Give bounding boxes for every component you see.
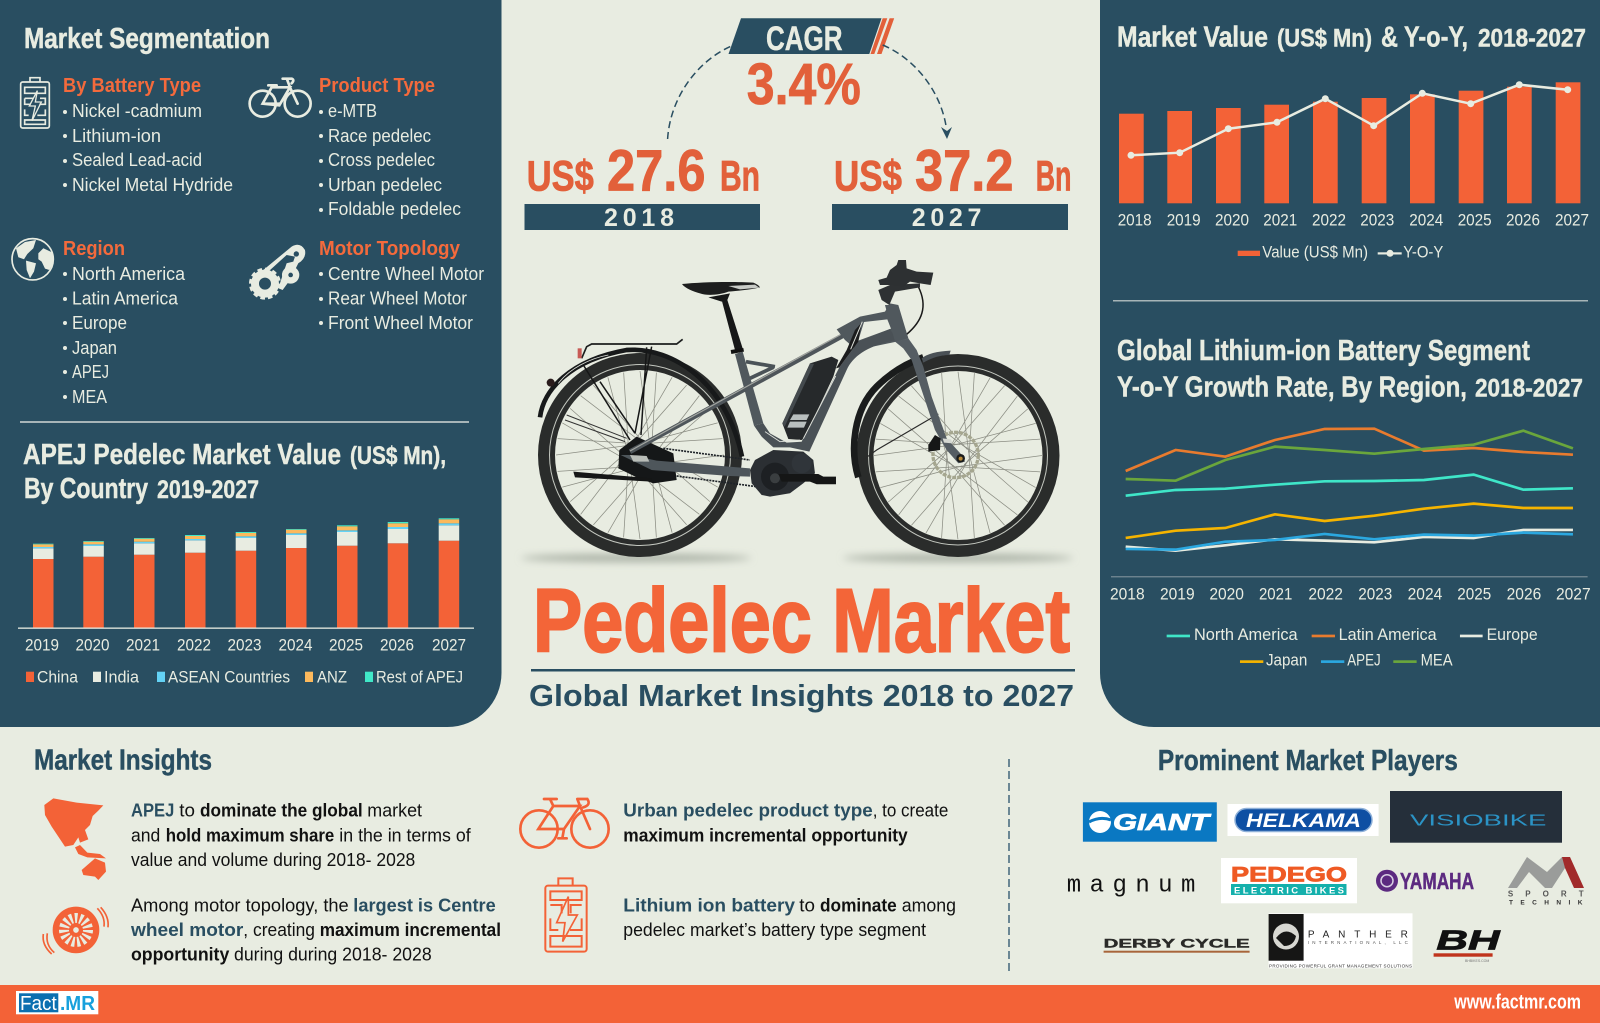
- list: by battery type: By Battery Type: [63, 75, 201, 97]
- logo: Yamaha: [1376, 868, 1474, 894]
- insight: APEJ: hold maximum share: [166, 824, 334, 845]
- footer: [0, 985, 1600, 1023]
- logo: Yamaha: YAMAHA: [1400, 868, 1474, 894]
- logo: Pedego: [1221, 858, 1357, 903]
- stacked bar chart: APEJ by country: 2021: [126, 636, 160, 655]
- line chart: growth by region: 2026: [1507, 584, 1541, 603]
- rear section of the bicycle: [540, 339, 757, 487]
- combo chart: market value and YoY: 2025: [1458, 211, 1492, 230]
- list: region: Region: [63, 238, 125, 260]
- chart legend: value and YoY: Y-O-Y: [1403, 243, 1443, 262]
- stacked bar chart: APEJ by country: 2023: [228, 636, 262, 655]
- panel: CAGR and market size: [524, 18, 1071, 232]
- heading: market value: 2018-2027: [1478, 25, 1586, 53]
- list: motor topology: Motor Topology: [319, 238, 461, 260]
- list: by battery type: Sealed Lead-acid: [72, 150, 202, 170]
- insight: APEJ: APEJ: [131, 800, 174, 821]
- combo chart: market value and YoY: [1118, 81, 1589, 230]
- logo: Visiobike: [1390, 791, 1562, 843]
- logo: BH: [1434, 924, 1501, 963]
- chart legend: regions: Europe: [1487, 625, 1538, 644]
- list: product type: Foldable pedelec: [328, 199, 461, 219]
- insight: motor topology: during during 2018- 2028: [234, 944, 432, 965]
- title: Pedelec Market: Pedelec Market: [533, 572, 1070, 672]
- insight: lithium ion battery: [623, 894, 956, 940]
- logo: Panther: PROVIDING POWERFUL GRANT MANAGEMENT SOLUTIONS: [1269, 963, 1412, 968]
- insight: APEJ: [131, 800, 472, 870]
- icon: bicycle: [250, 79, 311, 117]
- insight: APEJ: market: [367, 800, 422, 821]
- logo: Pedego: ELECTRIC BIKES: [1234, 886, 1344, 896]
- logo: M1 Sport Technik: [1508, 857, 1584, 907]
- list: by battery type: Nickel -cadmium: [72, 101, 202, 121]
- panel: left market segmentation and APEJ: [0, 0, 502, 727]
- chart legend: value and YoY: [1238, 243, 1443, 262]
- chart legend: APEJ countries: China: [37, 668, 78, 687]
- value: 2018 market size: Bn: [720, 153, 760, 201]
- heading: market value: (US$ Mn): [1277, 25, 1372, 53]
- heading: APEJ pedelec market value: 2019-2027: [157, 476, 259, 504]
- arrow: dashed arc: [668, 45, 952, 139]
- logo: Fact.MR: .MR: [60, 993, 96, 1015]
- stacked bar chart: APEJ by country: 2026: [380, 636, 414, 655]
- insight: urban pedelec: Urban pedelec product type: [623, 800, 873, 821]
- insight: APEJ: in the in terms of: [339, 824, 472, 845]
- value: 2027 market size: Bn: [1036, 153, 1071, 201]
- logo: Helkama: [1228, 804, 1379, 836]
- list: motor topology: Front Wheel Motor: [328, 313, 473, 333]
- banner: CAGR: [728, 18, 894, 58]
- insight: motor topology: opportunity: [131, 944, 230, 965]
- icon: battery: [21, 78, 49, 128]
- insight: APEJ: dominate the global: [200, 800, 363, 821]
- list: product type: Product Type: [319, 75, 435, 97]
- line chart: growth by region: 2018: [1110, 584, 1145, 603]
- subtitle: Global Market Insights 2018 to 2027: [529, 678, 1074, 713]
- logo: Fact.MR: [16, 991, 98, 1015]
- logo: Derby Cycle: DERBY CYCLE: [1104, 936, 1250, 950]
- stacked bar chart: APEJ by country: 2022: [177, 636, 211, 655]
- chart legend: APEJ countries: Rest of APEJ: [376, 668, 463, 687]
- logo: Fact.MR: Fact: [20, 993, 57, 1015]
- icon: motor gears and belt: [250, 245, 305, 298]
- heading: APEJ pedelec market value: (US$ Mn),: [350, 442, 446, 470]
- heading: lithium-ion growth: Global Lithium-ion Battery Segment: [1117, 335, 1530, 367]
- insight: lithium ion battery: among: [902, 894, 956, 915]
- insight: APEJ: and: [131, 824, 160, 845]
- heading: lithium-ion growth: 2018-2027: [1475, 375, 1583, 403]
- combo chart: market value and YoY: 2026: [1506, 211, 1540, 230]
- chart legend: value and YoY: Value (US$ Mn): [1262, 243, 1368, 262]
- list: product type: Race pedelec: [328, 126, 431, 146]
- list: product type: Cross pedelec: [328, 150, 435, 170]
- value: 2027 market size: 2027: [912, 204, 981, 232]
- list: region: Japan: [72, 338, 117, 358]
- chart legend: regions: Japan: [1266, 651, 1307, 670]
- logo: M1 Sport Technik: TECHNIK: [1509, 900, 1583, 907]
- line chart: growth by region: 2019: [1160, 584, 1195, 603]
- line chart: growth by region: [1110, 429, 1591, 603]
- combo chart: market value and YoY: 2020: [1215, 211, 1249, 230]
- combo chart: market value and YoY: 2021: [1263, 211, 1297, 230]
- list: region: MEA: [72, 387, 107, 407]
- heading: market segmentation: Market Segmentation: [24, 23, 270, 55]
- list: region: [63, 238, 186, 407]
- chart legend: regions: Latin America: [1339, 625, 1437, 644]
- value: 2027 market size: US$: [834, 153, 902, 201]
- chart legend: APEJ countries: ASEAN Countries: [168, 668, 290, 687]
- heading: lithium-ion growth: [1117, 335, 1583, 404]
- combo chart: market value and YoY: 2018: [1118, 211, 1152, 230]
- insight: lithium ion battery: dominate: [820, 894, 897, 915]
- heading: market insights: Market Insights: [34, 744, 212, 776]
- insight: lithium ion battery: Lithium ion battery: [623, 894, 796, 915]
- list: by battery type: Lithium-ion: [72, 126, 161, 146]
- combo chart: market value and YoY: 2023: [1360, 211, 1394, 230]
- combo chart: market value and YoY: 2022: [1312, 211, 1346, 230]
- illustration: electric bicycle: [521, 260, 1073, 562]
- logo: M1 Sport Technik: SPORT: [1508, 890, 1584, 899]
- insight: urban pedelec: , to create: [873, 800, 948, 821]
- logo: Giant: GIANT: [1113, 809, 1212, 835]
- line chart: growth by region: 2025: [1457, 584, 1491, 603]
- value: 2018 market size: [524, 139, 760, 232]
- insight: lithium ion battery: pedelec market’s battery type segment: [623, 919, 926, 940]
- logo: Panther: [1269, 913, 1412, 968]
- list: region: Europe: [72, 313, 127, 333]
- banner: CAGR: CAGR: [766, 20, 842, 58]
- value: 2027 market size: [832, 139, 1071, 232]
- heading: market value: & Y-o-Y,: [1381, 22, 1468, 54]
- list: motor topology: Rear Wheel Motor: [328, 288, 467, 308]
- line chart: growth by region: 2023: [1358, 584, 1392, 603]
- icon: wheel motor: [43, 907, 108, 954]
- stacked bar chart: APEJ by country: 2024: [278, 636, 312, 655]
- line chart: growth by region: 2020: [1209, 584, 1244, 603]
- chart legend: APEJ countries: ANZ: [317, 668, 347, 687]
- stacked bar chart: APEJ by country: [18, 518, 474, 655]
- icon: globe: [12, 239, 53, 280]
- heading: market value: [1117, 22, 1586, 54]
- logo: Panther: PANTHER: [1308, 929, 1408, 940]
- logo: Panther: INTERNATIONAL, LLC: [1308, 940, 1409, 945]
- insight: lithium ion battery: to: [799, 894, 815, 915]
- combo chart: market value and YoY: 2027: [1555, 211, 1589, 230]
- value: 2018 market size: 27.6: [607, 139, 706, 204]
- icon: orange bicycle: [520, 799, 609, 848]
- list: by battery type: Nickel Metal Hydride: [72, 175, 233, 195]
- heading: prominent market players: Prominent Market Players: [1158, 745, 1458, 777]
- insight: motor topology: largest is Centre: [353, 894, 496, 915]
- list: region: Latin America: [72, 288, 179, 308]
- line chart: growth by region: 2021: [1259, 584, 1292, 603]
- heading: APEJ pedelec market value: APEJ Pedelec Market Value: [23, 439, 341, 471]
- insight: motor topology: , creating: [243, 919, 315, 940]
- insight: APEJ: to: [179, 800, 195, 821]
- logo: BH: BHBIKES.COM: [1465, 959, 1489, 963]
- chart legend: regions: North America: [1194, 625, 1298, 644]
- insight: motor topology: maximum incremental: [320, 919, 501, 940]
- panel: market insights: [34, 744, 956, 965]
- heading: market value: Market Value: [1117, 22, 1268, 54]
- logo: Giant: [1083, 802, 1217, 842]
- combo chart: market value and YoY: 2019: [1167, 211, 1201, 230]
- chart legend: regions: APEJ: [1347, 651, 1381, 670]
- stacked bar chart: APEJ by country: 2019: [25, 636, 59, 655]
- chart legend: regions: [1167, 625, 1538, 670]
- stacked bar chart: APEJ by country: 2027: [432, 636, 466, 655]
- icon: orange battery: [545, 878, 587, 952]
- list: product type: e-MTB: [328, 101, 377, 121]
- panel: prominent market players: [1067, 745, 1584, 968]
- line chart: growth by region: 2024: [1408, 584, 1442, 603]
- logo: magnum: magnum: [1067, 873, 1195, 900]
- value: 3.4 percent: 3.4%: [747, 52, 861, 117]
- heading: APEJ pedelec market value: By Country: [24, 473, 148, 505]
- insight: motor topology: Among motor topology, the: [131, 894, 349, 915]
- value: 2018 market size: US$: [527, 153, 594, 201]
- front section of the bicycle: [630, 260, 978, 497]
- value: 2027 market size: 37.2: [915, 139, 1014, 204]
- value: 2018 market size: 2018: [604, 204, 674, 232]
- chart legend: APEJ countries: [26, 668, 463, 687]
- heading: lithium-ion growth: Y-o-Y Growth Rate, By Region,: [1117, 372, 1467, 404]
- stacked bar chart: APEJ by country: 2025: [329, 636, 363, 655]
- list: region: North America: [72, 264, 186, 284]
- insight: motor topology: wheel motor: [130, 919, 243, 940]
- list: motor topology: [319, 238, 484, 333]
- line chart: growth by region: 2022: [1308, 584, 1343, 603]
- logo: Visiobike: VISIOBIKE: [1410, 813, 1546, 830]
- insight: motor topology: [130, 894, 501, 965]
- chart legend: APEJ countries: India: [104, 668, 140, 687]
- insight: urban pedelec: maximum incremental opportunity: [623, 824, 908, 845]
- chart legend: regions: MEA: [1421, 651, 1453, 670]
- list: product type: Urban pedelec: [328, 175, 442, 195]
- logo: BH: BH: [1436, 924, 1501, 955]
- icon: APEJ map: [44, 798, 106, 880]
- list: by battery type: [63, 75, 233, 195]
- stacked bar chart: APEJ by country: 2020: [76, 636, 110, 655]
- panel: right charts: [1100, 0, 1600, 727]
- line chart: growth by region: 2027: [1556, 584, 1591, 603]
- logo: Pedego: PEDEGO: [1231, 864, 1347, 887]
- list: product type: [319, 75, 461, 219]
- logo: Helkama: HELKAMA: [1246, 811, 1361, 832]
- list: region: APEJ: [72, 362, 109, 382]
- heading: APEJ pedelec market value: [23, 439, 446, 505]
- combo chart: market value and YoY: 2024: [1409, 211, 1443, 230]
- insight: urban pedelec: [623, 800, 948, 845]
- insight: APEJ: value and volume during 2018- 2028: [131, 849, 415, 870]
- list: motor topology: Centre Wheel Motor: [328, 264, 484, 284]
